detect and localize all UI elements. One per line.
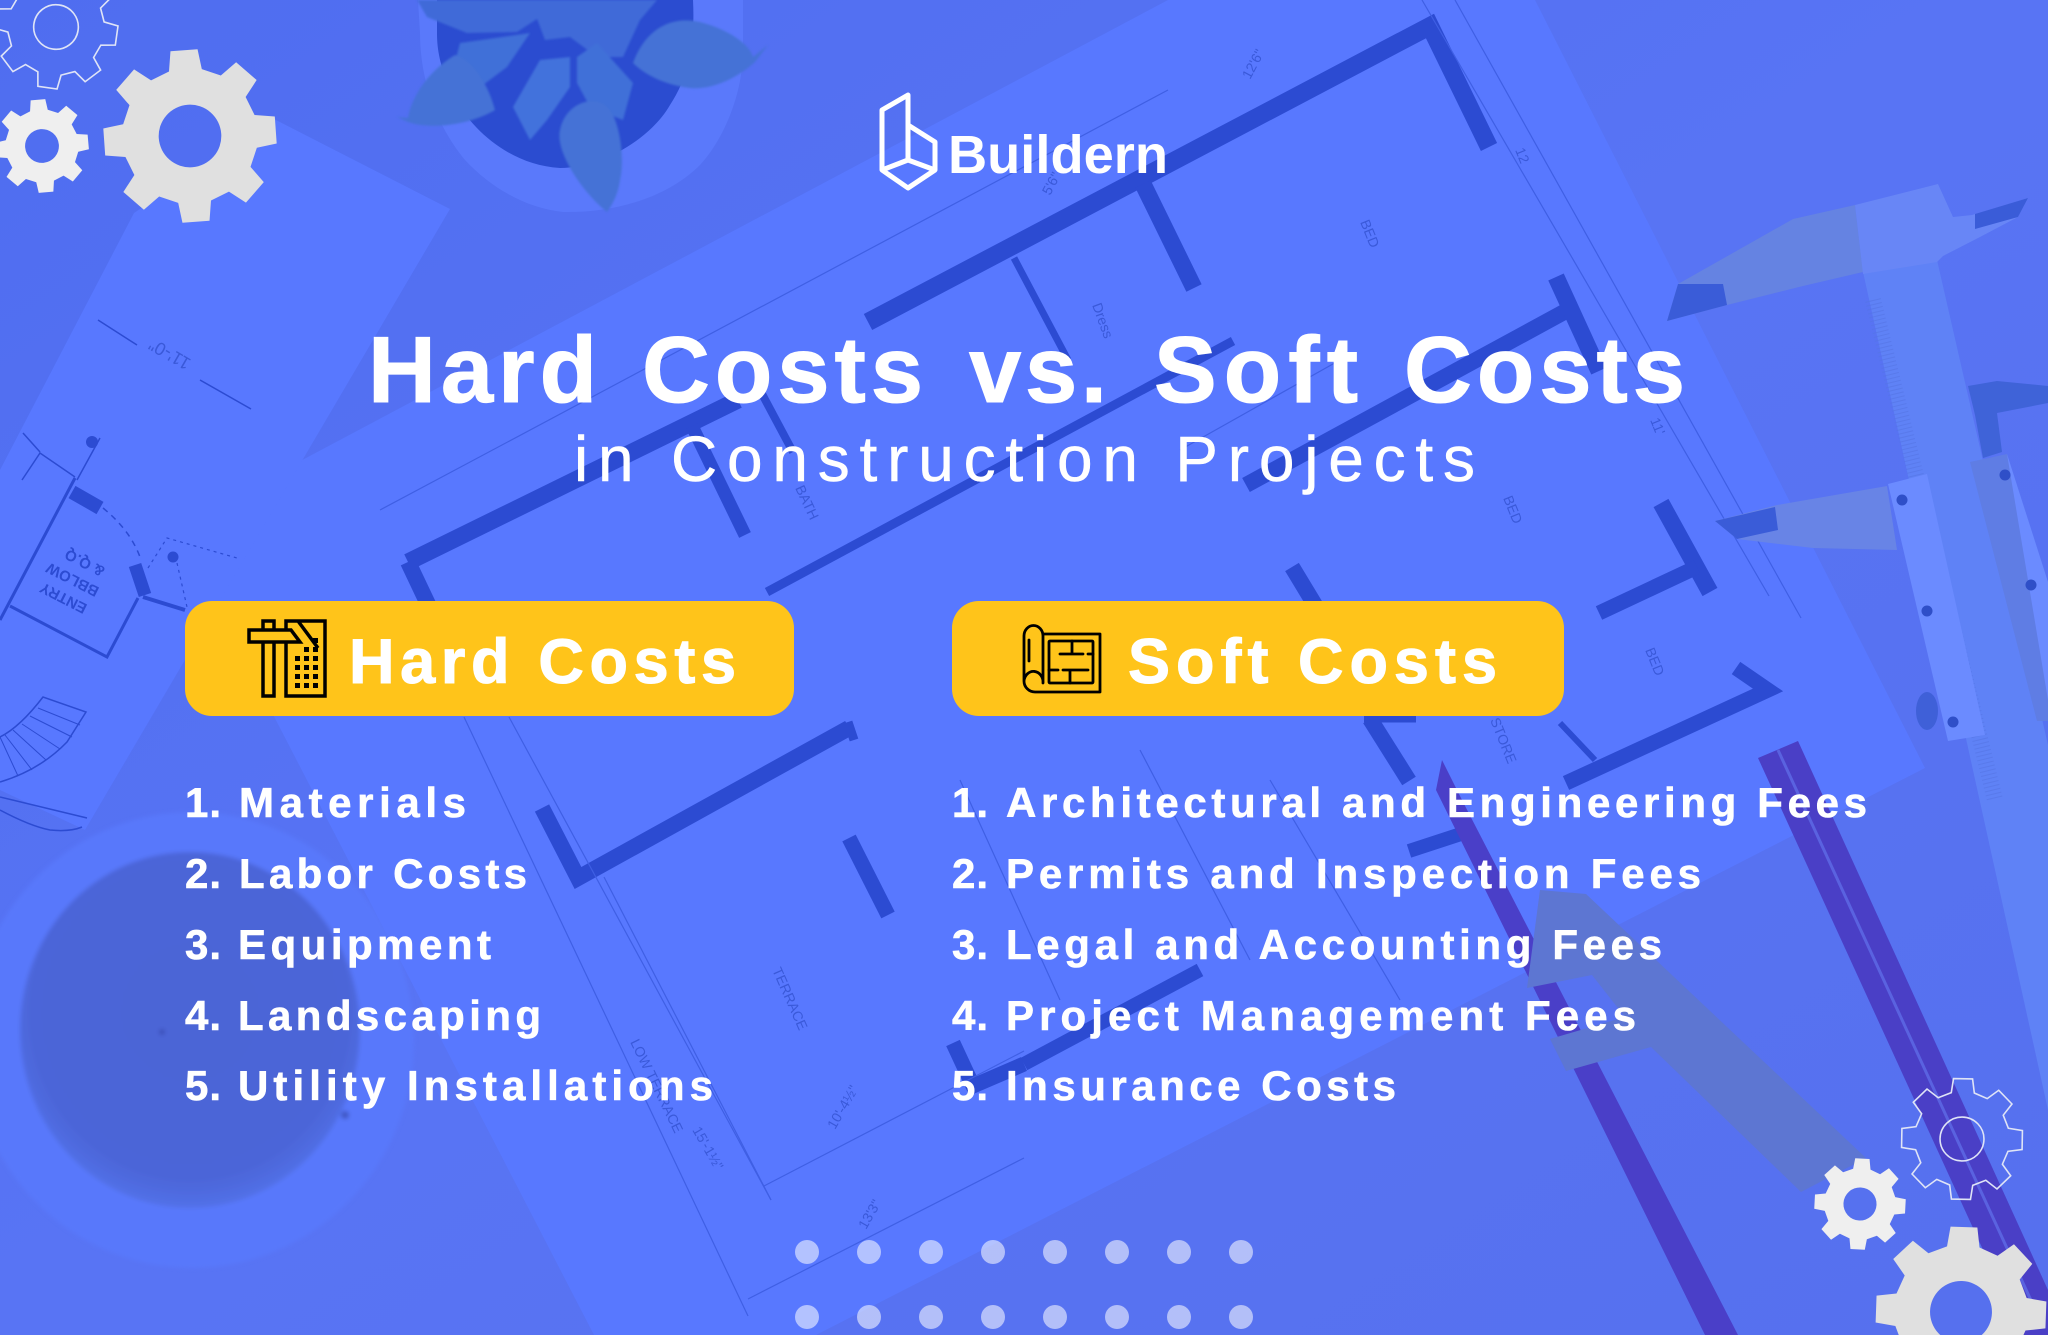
list: hard costs: Landscaping (238, 992, 541, 1039)
decorative dot grid (795, 1240, 1253, 1329)
list: soft costs: Legal and Accounting Fees (1006, 921, 1662, 968)
list: soft costs: Project Management Fees (1006, 992, 1636, 1039)
list: soft costs: 3. (952, 921, 989, 968)
background: floor plan: STORE (1487, 715, 1520, 766)
background: left blueprint sheet: BBLOW (43, 558, 102, 600)
background: coffee cup (0, 812, 414, 1268)
background: floor plan: TERRACE (769, 965, 811, 1032)
gear: small solid bottom right (1812, 1156, 1908, 1252)
icon: Buildern cube (882, 95, 935, 188)
background: left blueprint sheet: & Q.Q (62, 545, 108, 580)
background: floor plan: BED (1642, 645, 1668, 678)
title: Costs (1404, 317, 1685, 422)
subtitle: in Construction Projects (574, 423, 1475, 495)
background: left blueprint sheet: ENTRY (37, 579, 90, 617)
title: Costs (642, 317, 923, 422)
title (368, 317, 1685, 422)
list: hard costs: Labor Costs (239, 850, 527, 897)
list: hard costs: 3. (185, 921, 222, 968)
panel: Soft Costs (952, 601, 1564, 716)
logo (882, 95, 1168, 188)
title: Hard (368, 317, 597, 422)
background: floor plan: 13'3" (855, 1197, 884, 1232)
gear: small solid top left (0, 96, 92, 196)
gear: outline top left (0, 0, 125, 96)
background: floor plan: BATH (792, 483, 822, 522)
list: soft costs: Architectural and Engineering Fees (1006, 779, 1867, 826)
list: soft costs: Insurance Costs (1006, 1062, 1396, 1109)
list: soft costs: 4. (952, 992, 989, 1039)
list: soft costs (952, 779, 1867, 1109)
background: floor plan: 15'-1½" (689, 1124, 727, 1173)
background: floor plan: Dress (1089, 301, 1117, 340)
background: ruler holder (1527, 890, 1866, 1192)
panel: Hard Costs (185, 601, 794, 716)
title: vs. (969, 317, 1107, 422)
background: floor plan: 10'-4½" (824, 1082, 861, 1132)
wordmark: Buildern (948, 125, 1168, 185)
list: soft costs: Permits and Inspection Fees (1006, 850, 1701, 897)
background: purple pencils (1436, 741, 2048, 1335)
list: hard costs: Materials (239, 779, 466, 826)
icon: blueprint roll (1024, 626, 1100, 692)
decorative gears bottom right (1812, 1078, 2048, 1335)
background: floor plan: 11' (1647, 415, 1669, 437)
background: floor plan: BED (1500, 493, 1526, 526)
list: hard costs: Equipment (238, 921, 491, 968)
badge heading: Soft Costs (1128, 627, 1497, 697)
background: floor plan (380, 0, 1801, 1316)
list: soft costs: 5. (952, 1062, 989, 1109)
background: caliper (1667, 184, 2048, 1110)
decorative gears top left (0, 0, 282, 228)
background: floor plan: 12 (1512, 145, 1533, 166)
gear: outline bottom right (1901, 1078, 2023, 1200)
background: left blueprint sheet: 11'-0" (145, 334, 194, 374)
gear: large solid bottom right (1873, 1224, 2048, 1335)
list: hard costs: 4. (185, 992, 222, 1039)
background: floor plan: LOW TERRACE (627, 1036, 687, 1135)
list: soft costs: 1. (952, 779, 989, 826)
background: floor plan: 5'6" (1039, 169, 1064, 197)
background: floor plan: 12'6" (1239, 46, 1267, 81)
background: left blueprint sheet (0, 119, 450, 831)
list: hard costs (185, 779, 713, 1109)
list: hard costs: Utility Installations (238, 1062, 713, 1109)
list: hard costs: 2. (185, 850, 222, 897)
title: Soft (1154, 317, 1358, 422)
gear: large solid top left (98, 44, 282, 228)
icon: crane and building (249, 621, 325, 696)
badge: Soft Costs (952, 601, 1564, 716)
list: hard costs: 1. (185, 779, 222, 826)
badge heading: Hard Costs (349, 627, 736, 697)
background: plant in pot (397, 0, 768, 212)
list: soft costs: 2. (952, 850, 989, 897)
badge: Hard Costs (185, 601, 794, 716)
background: floor plan: BED (1357, 217, 1383, 250)
list: hard costs: 5. (185, 1062, 222, 1109)
